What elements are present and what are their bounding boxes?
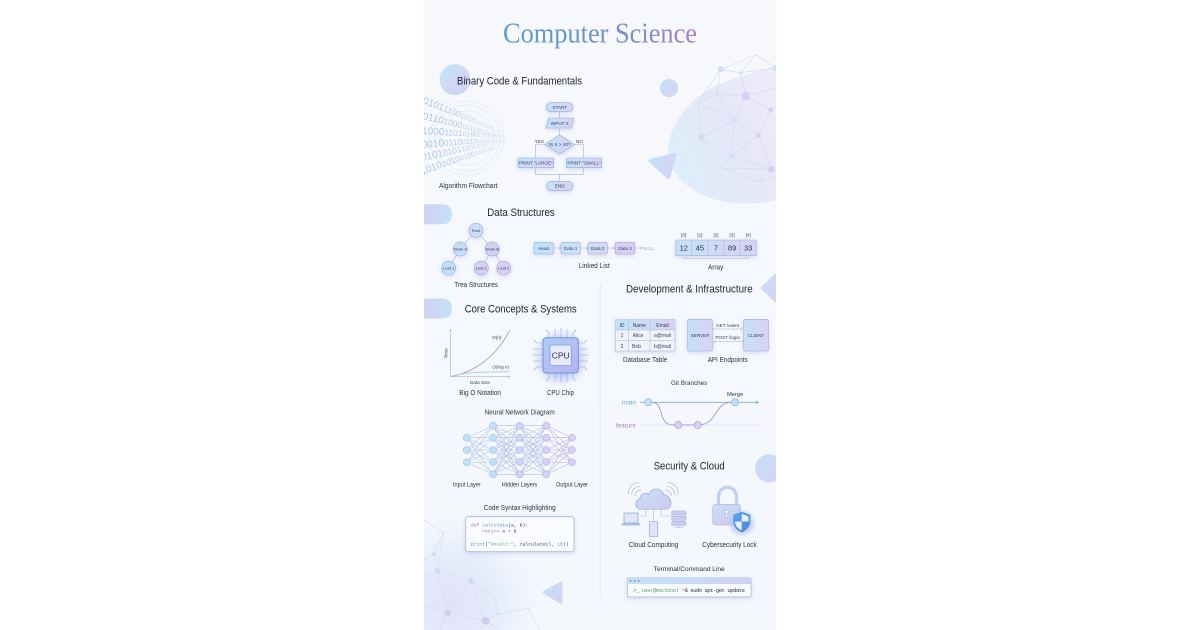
- terminal window: [627, 578, 751, 597]
- binary code graphic: 011010001011001010110101: [421, 111, 505, 141]
- API endpoints: GET /users: [716, 323, 740, 328]
- label: Algorithm Flowchart: Algorithm Flowchart: [439, 181, 498, 190]
- API endpoints: SERVER: [691, 333, 710, 338]
- neural network: [463, 422, 576, 478]
- database table: Email: [656, 323, 669, 329]
- API endpoints: POST /login: [715, 335, 740, 340]
- binary code graphic: 010101011001010110110010: [420, 134, 505, 164]
- flowchart: NO: [576, 139, 583, 144]
- array: 12: [680, 244, 688, 253]
- array: [2]: [713, 232, 719, 237]
- binary code graphic: 100011010100110101011100: [422, 126, 506, 141]
- decorative triangle bottom: [542, 582, 562, 604]
- label: Hidden Layers: Hidden Layers: [502, 482, 538, 489]
- git branches diagram: Merge: [727, 392, 743, 398]
- tree diagram: Leaf 1: [476, 266, 488, 270]
- CPU chip: CPU: [552, 350, 570, 360]
- label: Neural Network Diagram: Neural Network Diagram: [485, 408, 555, 416]
- decorative top-right sphere: [668, 55, 779, 204]
- tree diagram: Leaf 1: [443, 266, 455, 270]
- label: Git Branches: Git Branches: [671, 380, 708, 387]
- database table: b@mail: [654, 344, 671, 350]
- flowchart: IS X > 10?: [549, 142, 571, 147]
- poster background: [424, 0, 776, 630]
- label: API Endpoints: API Endpoints: [708, 355, 748, 364]
- decorative diamond right: [761, 273, 776, 303]
- database table: 2: [621, 344, 624, 350]
- flowchart: PRINT "LARGE": [519, 160, 553, 166]
- array: [3]: [730, 232, 735, 237]
- API endpoints: CLIENT: [748, 333, 764, 338]
- big O chart: O(log n): [492, 364, 509, 369]
- database table: a@mail: [654, 333, 671, 339]
- terminal window: >_ user@machine: ~$ sudo apt-get update: [633, 587, 745, 594]
- flowchart: YES: [535, 139, 544, 144]
- array: [676, 232, 756, 258]
- decorative triangle top: [648, 153, 677, 179]
- binary code graphic: 10101010010010100101: [419, 141, 497, 178]
- decorative circle right: [755, 454, 776, 482]
- CPU chip: [532, 328, 590, 387]
- tree diagram: Leaf 2: [498, 266, 510, 270]
- code block: print("Result:", calculate(5, 10)): [471, 541, 569, 547]
- big O chart: [443, 329, 510, 385]
- code block: return a + b: [482, 529, 517, 535]
- title: Computer Science: [503, 18, 697, 50]
- heading: Security & Cloud: Security & Cloud: [654, 460, 725, 472]
- label: Linked List: Linked List: [579, 261, 610, 270]
- label: Input Layer: Input Layer: [453, 482, 481, 489]
- API endpoints: [688, 319, 768, 351]
- linked list: NULL: [643, 246, 655, 251]
- label: Trea Structures: Trea Structures: [454, 280, 498, 289]
- code block: def calculate(a, b):: [471, 522, 528, 528]
- tree diagram: Node A: [454, 246, 467, 252]
- flowchart: PRINT "SMALL": [567, 160, 601, 166]
- array: 7: [714, 244, 718, 253]
- cloud computing icon: [622, 482, 686, 537]
- label: Database Table: Database Table: [623, 355, 667, 364]
- heading: Binary Code & Fundamentals: Binary Code & Fundamentals: [457, 76, 582, 88]
- binary code graphic: 010111001010110100111010: [421, 96, 503, 136]
- git branches diagram: feature: [616, 422, 636, 429]
- linked list: Data 2: [591, 246, 605, 251]
- big O chart: Time: [443, 348, 448, 358]
- code block: [466, 517, 574, 552]
- label: Terminal/Command Line: Terminal/Command Line: [654, 566, 725, 573]
- flowchart: START: [552, 105, 567, 110]
- array: 89: [728, 244, 736, 253]
- label: CPU Chip: CPU Chip: [547, 388, 574, 397]
- big O chart: O(n): [492, 335, 502, 340]
- cybersecurity lock icon: [713, 487, 757, 538]
- decorative circle top-middle: [660, 79, 678, 97]
- tree diagram: Node B: [486, 246, 499, 252]
- array: 33: [744, 244, 752, 253]
- git branches diagram: main: [622, 400, 636, 407]
- database table: Alice: [633, 333, 644, 339]
- binary code graphic: [424, 97, 505, 176]
- array: [0]: [681, 232, 686, 237]
- label: Output Layer: Output Layer: [556, 482, 589, 489]
- git branches diagram: [616, 392, 758, 429]
- database table: [615, 319, 675, 351]
- flowchart: INPUT X: [551, 121, 569, 126]
- big O chart: Data Size: [470, 380, 490, 385]
- database table: Name: [633, 323, 646, 329]
- decorative tab left data structures: [424, 204, 452, 224]
- tree diagram: [442, 223, 511, 275]
- array: [4]: [746, 232, 751, 237]
- database table: Bob: [632, 344, 641, 350]
- decorative bottom-left network: [424, 520, 540, 630]
- array: [1]: [697, 232, 702, 237]
- heading: Development & Infrastructure: Development & Infrastructure: [626, 283, 753, 295]
- flowchart: END: [555, 184, 565, 189]
- linked list: Data 1: [564, 246, 578, 251]
- label: Big O Notation: Big O Notation: [459, 388, 501, 397]
- linked list: [534, 242, 655, 254]
- tree diagram: Root: [472, 228, 481, 233]
- decorative tab left core concepts: [424, 298, 452, 318]
- database table: ID: [620, 323, 625, 329]
- decorative circle top-left: [440, 64, 470, 95]
- database table: 1: [621, 333, 624, 339]
- label: Array: Array: [708, 262, 724, 272]
- label: Cloud Computing: Cloud Computing: [629, 540, 678, 549]
- array: 45: [696, 244, 704, 253]
- linked list: Head: [538, 246, 550, 251]
- heading: Core Concepts & Systems: Core Concepts & Systems: [465, 303, 577, 315]
- flowchart: [518, 103, 602, 191]
- divider: [600, 284, 601, 596]
- binary code graphic: 001001100110100101100101: [421, 133, 505, 151]
- heading: Data Structures: Data Structures: [487, 207, 555, 219]
- linked list: Data 3: [618, 246, 632, 251]
- label: Cybersecurity Lock: Cybersecurity Lock: [702, 540, 757, 549]
- label: Code Syntax Highlighting: Code Syntax Highlighting: [484, 503, 556, 512]
